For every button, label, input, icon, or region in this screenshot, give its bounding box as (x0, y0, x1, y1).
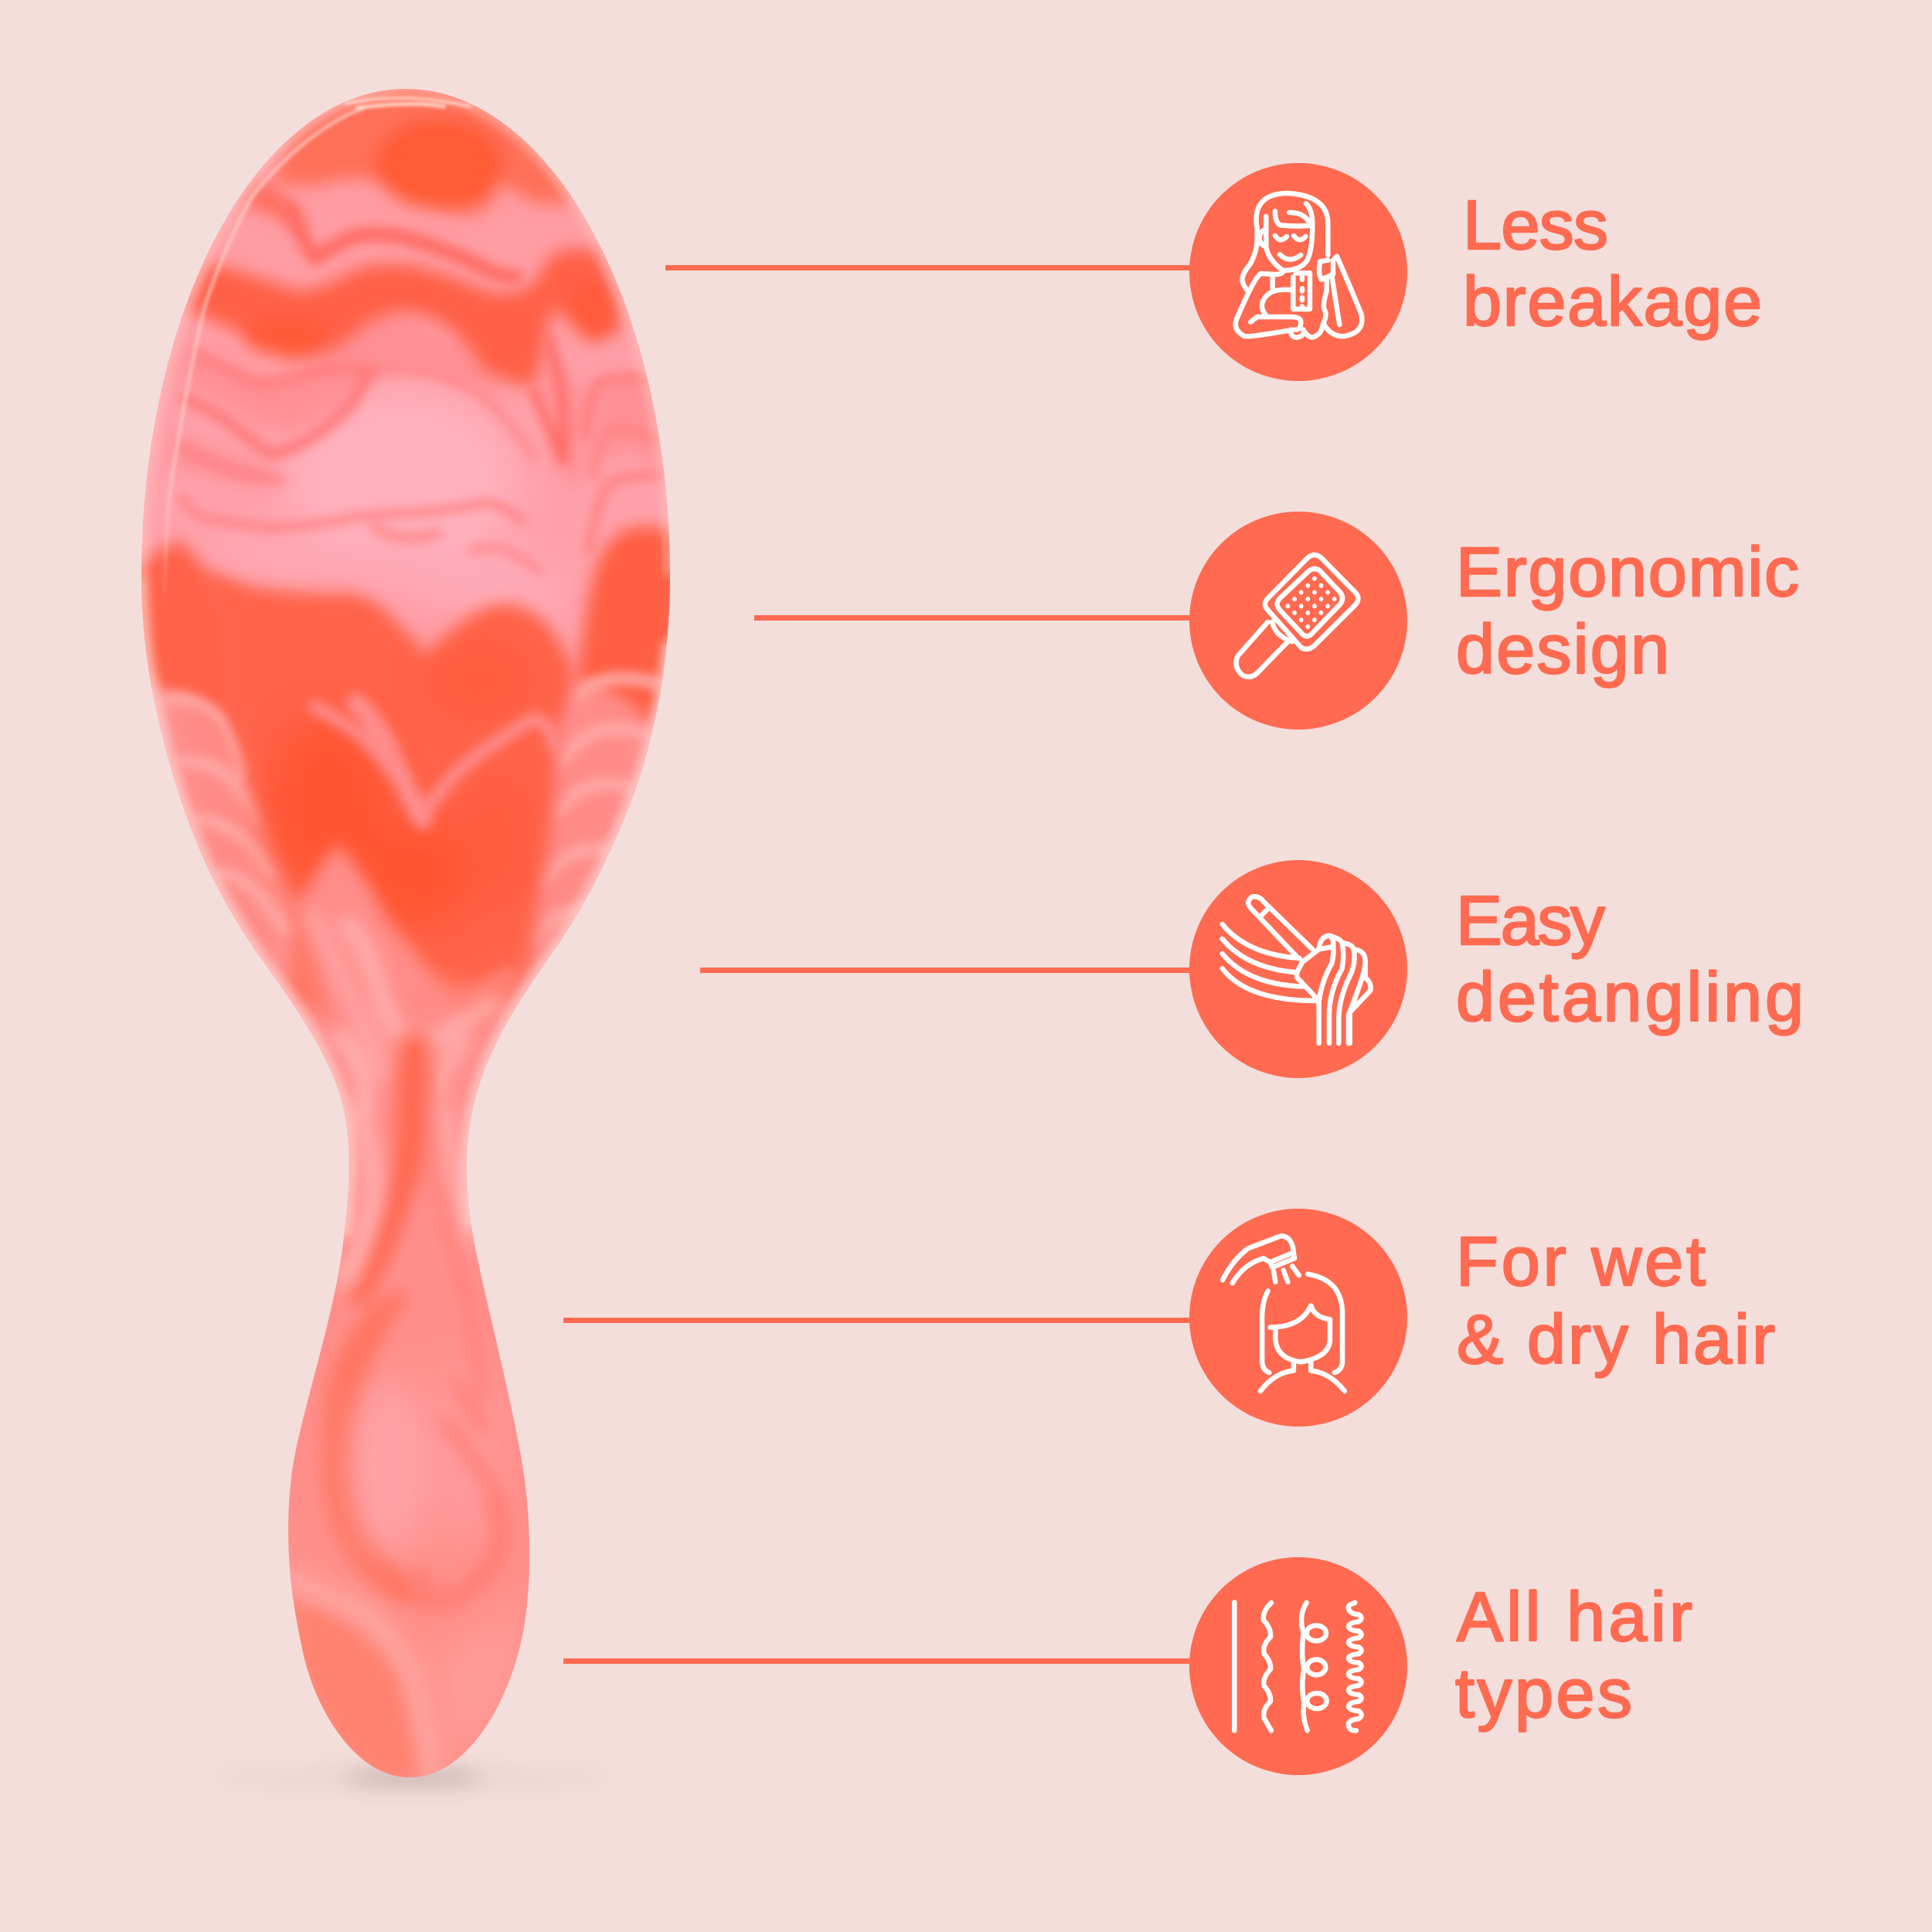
soft light rim on lower edges (141, 576, 669, 1236)
connector line 2 (754, 615, 1191, 621)
upper rim glow (141, 89, 670, 576)
central orange mass (209, 574, 574, 1036)
text: Less breakage: Less (1463, 187, 1608, 264)
text: Ergonomic design: design (1456, 611, 1669, 689)
orange wave band (185, 249, 622, 387)
badge: less breakage (1189, 163, 1407, 381)
text: Ergonomic design (1456, 534, 1799, 689)
light swirls inside the orange (315, 703, 556, 819)
text: Less breakage (1463, 187, 1762, 341)
pink wedge below orange (302, 839, 480, 1037)
text: All hair types: All hair (1457, 1579, 1692, 1656)
icon: paddle brush (1236, 555, 1358, 677)
thin marbling stripes on the upper paddle (182, 209, 665, 572)
connector line 5 (563, 1658, 1191, 1664)
pale centre of the paddle (286, 383, 549, 612)
text: For wet & dry hair: & dry hair (1457, 1301, 1775, 1379)
connector line 3 (700, 968, 1191, 973)
badge: all hair types (1189, 1557, 1407, 1775)
badge: easy detangling (1189, 860, 1407, 1078)
text: Easy detangling (1456, 883, 1804, 1036)
text: Easy detangling: detangling (1456, 959, 1804, 1036)
connector line 1 (665, 265, 1191, 270)
icon: woman brushing hair (1236, 193, 1362, 338)
badge: for wet and dry hair (1189, 1209, 1407, 1427)
lower paddle lighter field with chevrons (166, 686, 648, 952)
orange top cap (243, 81, 576, 232)
illustration: marbled hair brush (141, 89, 670, 1777)
orange side bands (131, 526, 680, 804)
soft darker pink shading between stripes (170, 313, 665, 495)
text: All hair types: types (1455, 1655, 1632, 1733)
connector line 4 (563, 1318, 1191, 1323)
handle colouring (296, 1036, 433, 1777)
text: All hair types (1455, 1579, 1692, 1733)
text: Easy detangling: Easy (1456, 883, 1605, 960)
brush ground shadow (212, 1767, 614, 1788)
top gloss (345, 98, 471, 108)
text: Ergonomic design: Ergonomic (1456, 534, 1799, 611)
badge: ergonomic design (1189, 512, 1407, 730)
icon: straight wavy curly coily strands (1234, 1602, 1362, 1730)
icon: hand detangling hair with comb (1223, 896, 1371, 1043)
darkest orange glow (267, 645, 533, 927)
inner bevel highlight (165, 108, 363, 611)
icon: shower over head (1223, 1236, 1345, 1391)
text: Less breakage: breakage (1463, 264, 1762, 341)
text: For wet & dry hair (1456, 1223, 1775, 1379)
text: For wet & dry hair: For wet (1456, 1223, 1706, 1301)
